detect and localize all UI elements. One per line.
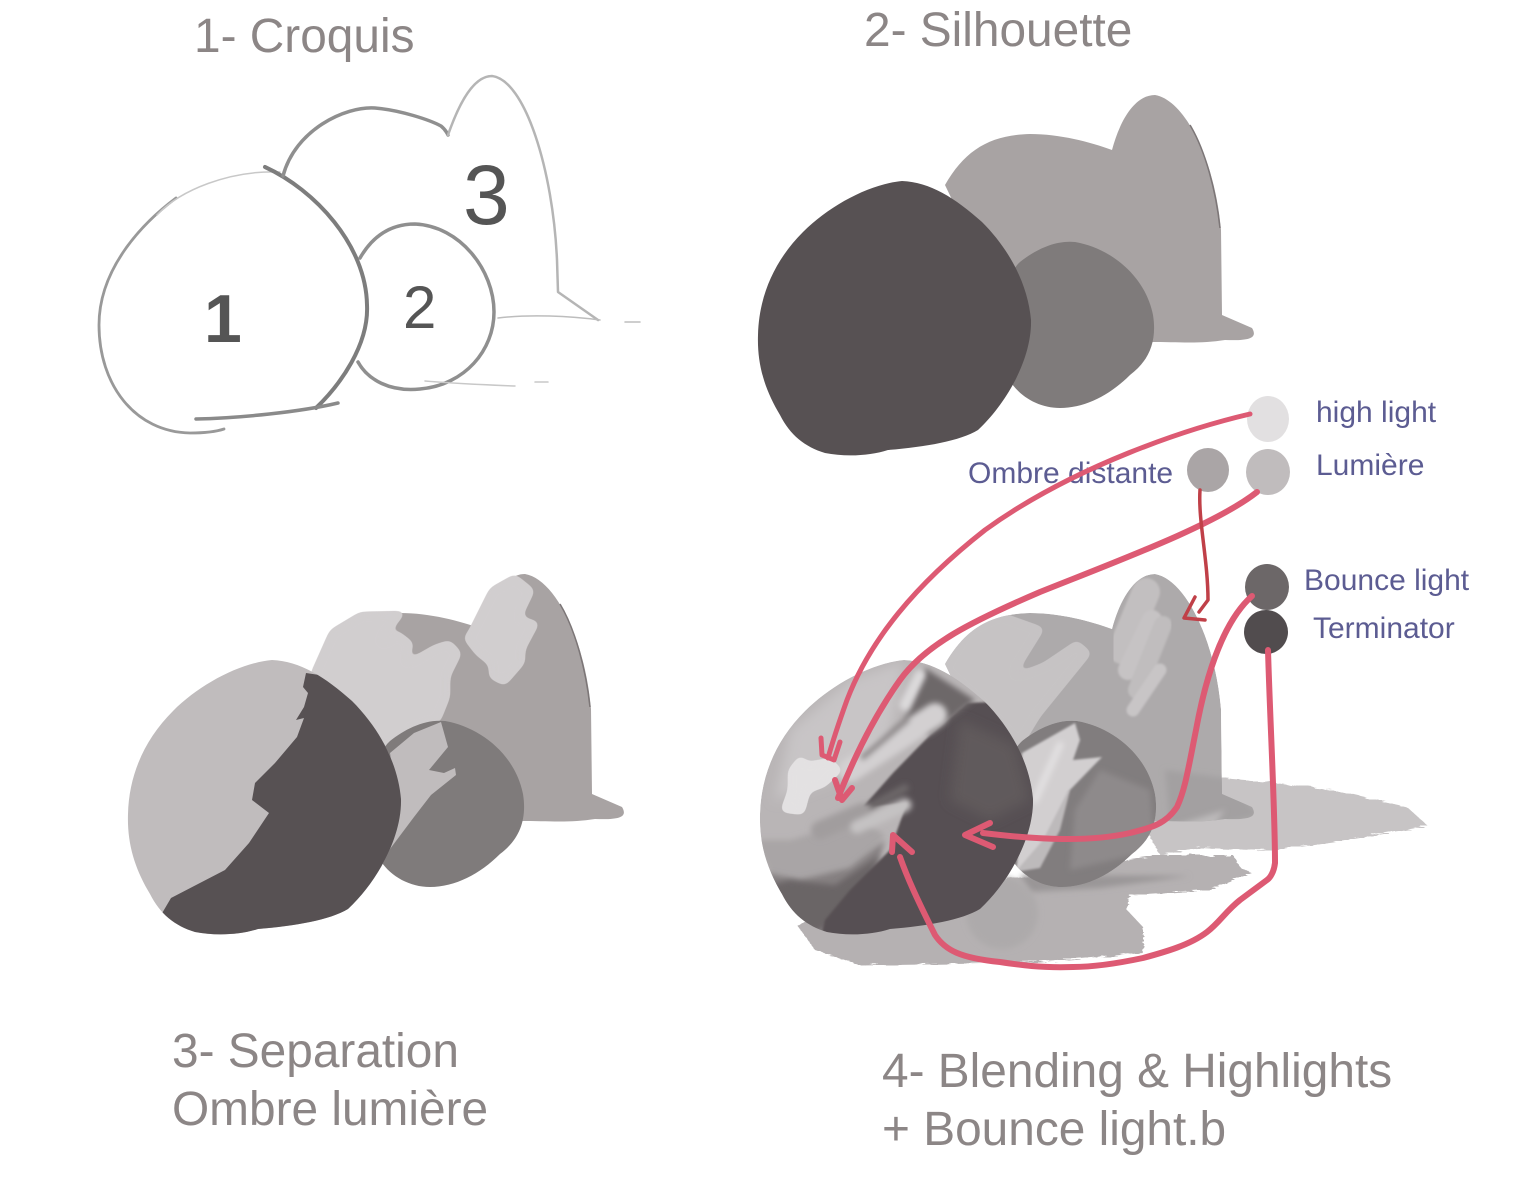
front rock light [128,660,401,934]
panel: silhouette [758,95,1254,455]
front rock shadow [162,673,401,934]
arrow: ombre distante to back rock [1184,490,1208,620]
back rock base [315,574,624,822]
panel: sketch of three rocks [99,76,640,433]
number 2: 2 [403,274,436,341]
label: Lumière: Lumière [1316,449,1424,482]
label: Terminator: Terminator [1313,612,1455,645]
label: Bounce light: Bounce light [1304,564,1470,597]
label: Ombre distante: Ombre distante [968,457,1173,490]
arrow: high light to front rock [821,414,1250,760]
number 1: 1 [204,281,242,357]
title: 3- Separation Ombre lumière: Ombre lumière [172,1083,488,1136]
blob shadow [966,877,1038,949]
number 3: 3 [463,148,510,242]
cast shadow on the ground [797,778,1428,965]
back rock silhouette [945,95,1254,342]
middle rock base [372,721,524,887]
title: 2- Silhouette: 2- Silhouette [864,4,1132,57]
middle rock shaded [1004,721,1156,887]
sketch: front rock outline [99,167,367,433]
middle rock light patch [387,722,456,853]
swatch: high light [1247,396,1289,442]
label: high light: high light [1316,396,1437,429]
middle rock silhouette [1002,242,1154,408]
title: 4- Blending & Highlights + Bounce light.b: + Bounce light.b [882,1103,1226,1156]
front rock silhouette [758,181,1031,455]
arrow: bounce light to front rock [965,596,1252,847]
panel: light and shadow separation [128,574,624,960]
swatch: ombre distante [1187,448,1229,492]
back rock shaded [945,574,1254,822]
back rock light patches [310,574,540,752]
arrow: terminator to front rock [892,650,1275,967]
front rock shaded [755,660,1040,940]
title: 4- Blending & Highlights + Bounce light.b: 4- Blending & Highlights [882,1045,1392,1098]
swatch: bounce light [1245,564,1289,610]
arrow: lumière to front rock [835,492,1257,800]
swatch: terminator [1244,610,1288,654]
sketch: back rock outline [283,76,640,322]
swatch: lumière [1246,449,1290,495]
sketch: middle rock outline [358,224,548,389]
title: 1- Croquis: 1- Croquis [194,10,414,63]
title: 3- Separation Ombre lumière: 3- Separation [172,1025,459,1078]
panel: blending, highlights and bounce light [755,396,1470,967]
